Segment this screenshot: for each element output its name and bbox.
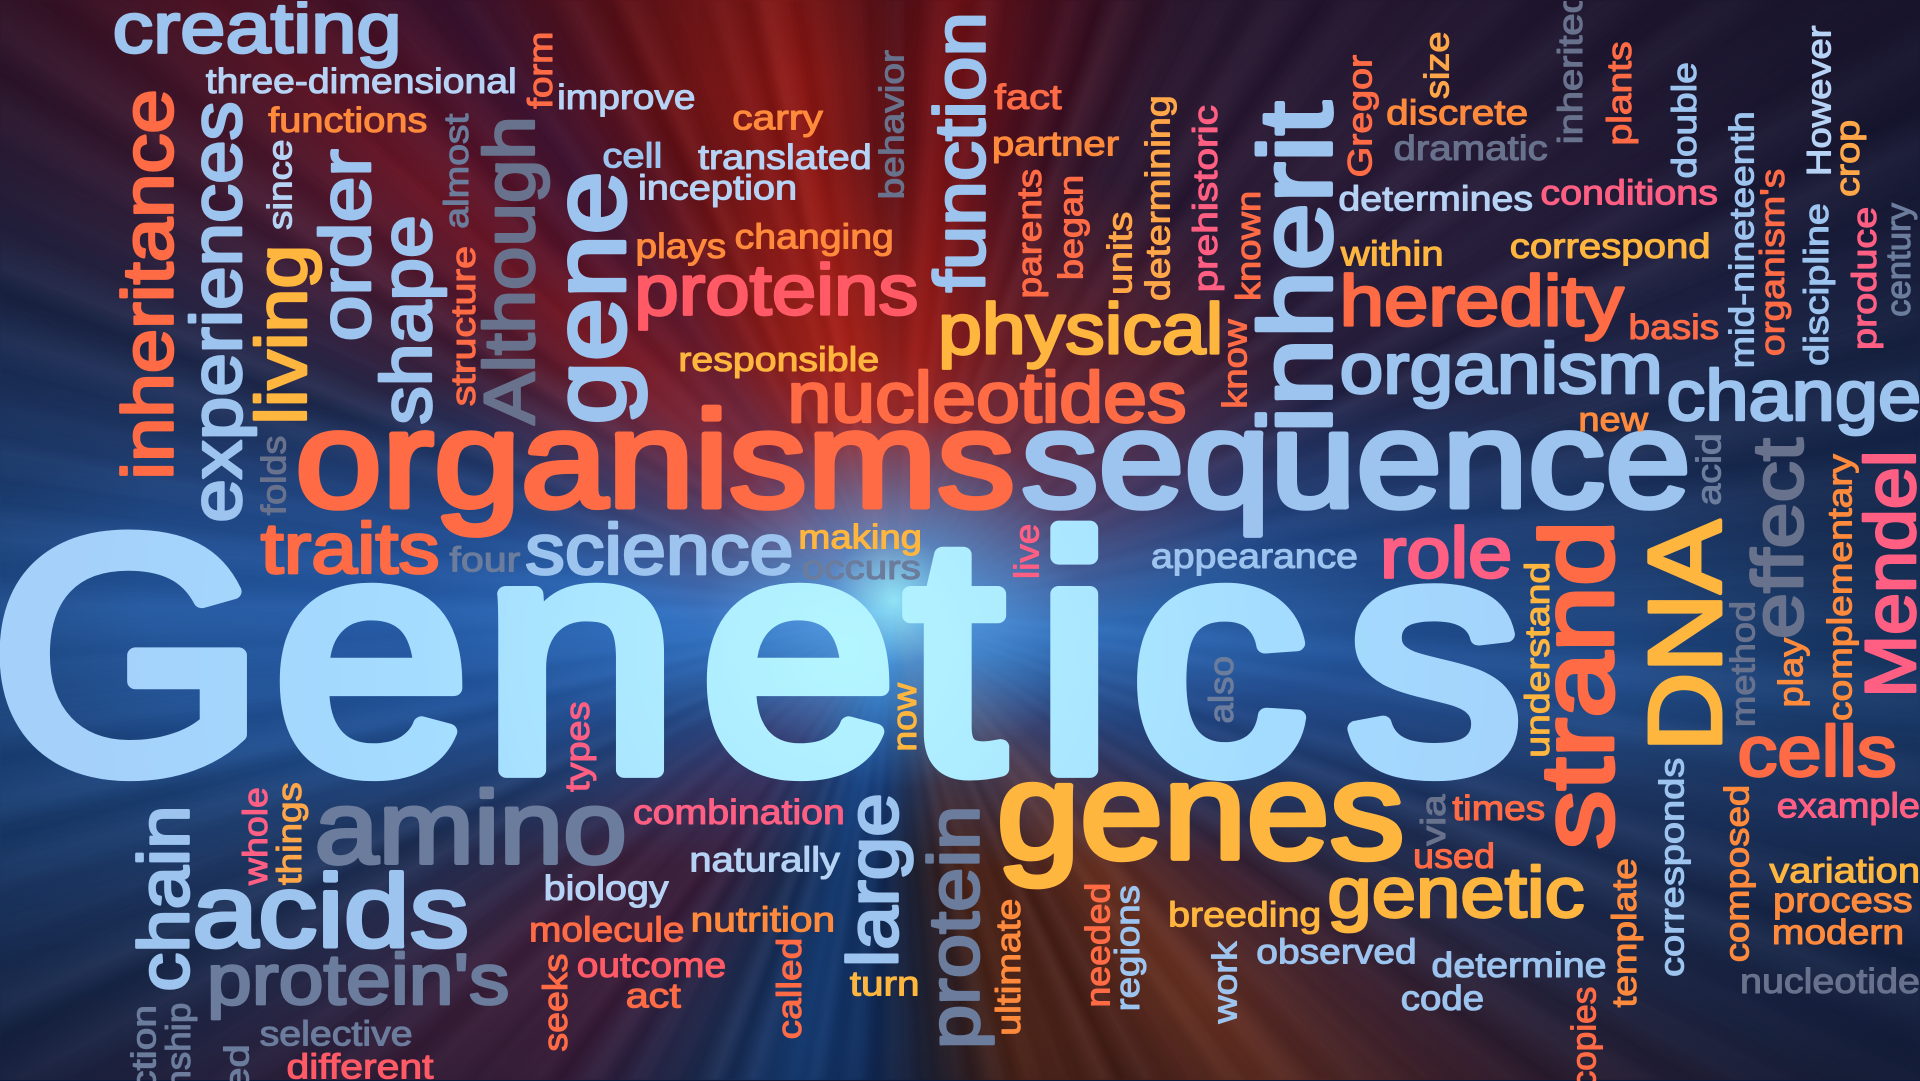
word: acids: acids bbox=[192, 853, 469, 968]
word: times: times bbox=[1452, 788, 1545, 828]
word: carry: carry bbox=[732, 98, 823, 138]
word: work: work bbox=[1207, 940, 1245, 1025]
word: DNA: DNA bbox=[1627, 520, 1742, 752]
word: discipline: discipline bbox=[1798, 203, 1836, 366]
word: acid: acid bbox=[1690, 433, 1728, 505]
word: chain: chain bbox=[126, 805, 205, 992]
word: discrete: discrete bbox=[1386, 93, 1528, 133]
word: shape: shape bbox=[368, 215, 447, 425]
word: molecule: molecule bbox=[529, 909, 684, 949]
word: three-dimensional: three-dimensional bbox=[206, 61, 517, 101]
word: needed: needed bbox=[1079, 883, 1117, 1008]
word: strand: strand bbox=[1520, 520, 1635, 850]
word: folds: folds bbox=[255, 436, 293, 515]
word: plants: plants bbox=[1601, 41, 1639, 145]
word: heredity: heredity bbox=[1340, 262, 1624, 341]
word: double: double bbox=[1666, 62, 1704, 179]
word: fact: fact bbox=[994, 77, 1062, 117]
word: role: role bbox=[1380, 515, 1512, 594]
word: genetic: genetic bbox=[1327, 854, 1584, 933]
word: form: form bbox=[522, 32, 560, 109]
word: conditions: conditions bbox=[1540, 172, 1718, 212]
word: organisms: organisms bbox=[295, 384, 1015, 537]
word: structure: structure bbox=[445, 246, 483, 406]
word: produce: produce bbox=[1846, 207, 1884, 350]
word: determine: determine bbox=[1431, 945, 1607, 985]
word: called: called bbox=[771, 938, 809, 1039]
word: responsible: responsible bbox=[678, 341, 879, 379]
word: turn: turn bbox=[850, 963, 920, 1003]
word: nutrition: nutrition bbox=[691, 900, 835, 940]
word: biology: biology bbox=[544, 868, 669, 908]
word: living: living bbox=[243, 245, 322, 425]
word: via: via bbox=[1415, 793, 1453, 846]
word: template: template bbox=[1606, 858, 1644, 1008]
word: types: types bbox=[559, 701, 597, 792]
word: naturally: naturally bbox=[689, 840, 840, 880]
word: large: large bbox=[835, 793, 914, 967]
word: inherit: inherit bbox=[1238, 101, 1353, 433]
word: inherited: inherited bbox=[1552, 1, 1590, 144]
word: now: now bbox=[886, 683, 924, 752]
word: order: order bbox=[307, 149, 386, 341]
word: also: also bbox=[1203, 656, 1241, 723]
word: play: play bbox=[1772, 637, 1810, 708]
word: live: live bbox=[1008, 524, 1046, 579]
word: inheritance: inheritance bbox=[110, 89, 189, 480]
word: act: act bbox=[626, 976, 681, 1016]
word: genes: genes bbox=[997, 735, 1404, 888]
word: code: code bbox=[1401, 978, 1484, 1018]
word: seeks: seeks bbox=[537, 954, 575, 1052]
word: Genetics: Genetics bbox=[0, 468, 1523, 841]
word: proteins: proteins bbox=[634, 251, 918, 330]
word: new: new bbox=[1578, 401, 1648, 439]
word: century: century bbox=[1880, 202, 1918, 317]
word: example: example bbox=[1777, 786, 1920, 826]
word: regions: regions bbox=[1109, 885, 1147, 1011]
word: changing: changing bbox=[735, 216, 894, 256]
word: Gregor: Gregor bbox=[1341, 55, 1379, 177]
word: organism: organism bbox=[1340, 330, 1663, 409]
word: used: used bbox=[1413, 836, 1495, 876]
word: corresponds: corresponds bbox=[1654, 758, 1692, 977]
word: modern: modern bbox=[1772, 912, 1904, 952]
word: method: method bbox=[1725, 601, 1763, 727]
word: amino: amino bbox=[315, 770, 627, 885]
word: functions: functions bbox=[268, 100, 427, 140]
word: four: four bbox=[449, 540, 521, 580]
word: complementary: complementary bbox=[1821, 453, 1859, 721]
word: translated: translated bbox=[698, 137, 872, 177]
word: determining: determining bbox=[1139, 95, 1177, 301]
word: know: know bbox=[1217, 319, 1255, 409]
word: gene: gene bbox=[531, 171, 646, 425]
word: change: change bbox=[1667, 357, 1920, 436]
word: breeding: breeding bbox=[1168, 895, 1321, 935]
word: mid-nineteenth: mid-nineteenth bbox=[1723, 111, 1761, 368]
word: almost: almost bbox=[438, 113, 476, 229]
word: making: making bbox=[798, 518, 922, 556]
word: experiences: experiences bbox=[178, 101, 257, 523]
word: correspond: correspond bbox=[1510, 226, 1711, 266]
word: prehistoric: prehistoric bbox=[1187, 105, 1225, 292]
word: began: began bbox=[1052, 175, 1090, 280]
word: organism's: organism's bbox=[1754, 169, 1792, 356]
word: Although: Although bbox=[471, 116, 550, 425]
word: since: since bbox=[261, 139, 299, 230]
word: combination: combination bbox=[633, 792, 845, 832]
word: composed: composed bbox=[1719, 785, 1757, 962]
word: protein: protein bbox=[915, 805, 994, 1049]
word: appearance: appearance bbox=[1151, 536, 1358, 576]
word: within: within bbox=[1340, 233, 1444, 273]
word: determines: determines bbox=[1338, 178, 1533, 218]
word: basis: basis bbox=[1629, 307, 1719, 347]
word: improve: improve bbox=[557, 77, 696, 117]
word: observed: observed bbox=[1256, 931, 1417, 971]
word: nucleotide: nucleotide bbox=[1740, 961, 1920, 1001]
word: inception: inception bbox=[638, 167, 797, 207]
word: crop: crop bbox=[1829, 120, 1867, 197]
word: units: units bbox=[1101, 212, 1139, 295]
word: parents: parents bbox=[1011, 169, 1049, 299]
word: behavior: behavior bbox=[874, 50, 912, 199]
word: size: size bbox=[1419, 32, 1457, 99]
word: However: However bbox=[1801, 25, 1839, 176]
word: dramatic: dramatic bbox=[1393, 128, 1548, 168]
word: things: things bbox=[271, 782, 309, 885]
word: selective: selective bbox=[260, 1013, 413, 1053]
word: understand: understand bbox=[1519, 562, 1557, 758]
word: outcome: outcome bbox=[577, 945, 726, 985]
word: known: known bbox=[1230, 191, 1268, 301]
word: effect: effect bbox=[1739, 438, 1818, 639]
word: partner: partner bbox=[992, 123, 1119, 163]
word: cell: cell bbox=[602, 136, 662, 176]
word: function: function bbox=[921, 12, 1000, 292]
word: ultimate: ultimate bbox=[990, 899, 1028, 1036]
word: science: science bbox=[525, 511, 793, 590]
word: traits: traits bbox=[261, 510, 440, 589]
word: plays: plays bbox=[636, 226, 726, 266]
word: nucleotides: nucleotides bbox=[787, 359, 1187, 438]
word: sequence: sequence bbox=[1021, 384, 1691, 537]
word: protein's: protein's bbox=[207, 941, 509, 1020]
word: occurs: occurs bbox=[802, 549, 921, 587]
word: variation: variation bbox=[1769, 851, 1920, 891]
word: whole: whole bbox=[237, 787, 275, 886]
word: physical: physical bbox=[938, 291, 1223, 370]
word: cells: cells bbox=[1738, 713, 1897, 792]
word: process: process bbox=[1773, 880, 1913, 920]
